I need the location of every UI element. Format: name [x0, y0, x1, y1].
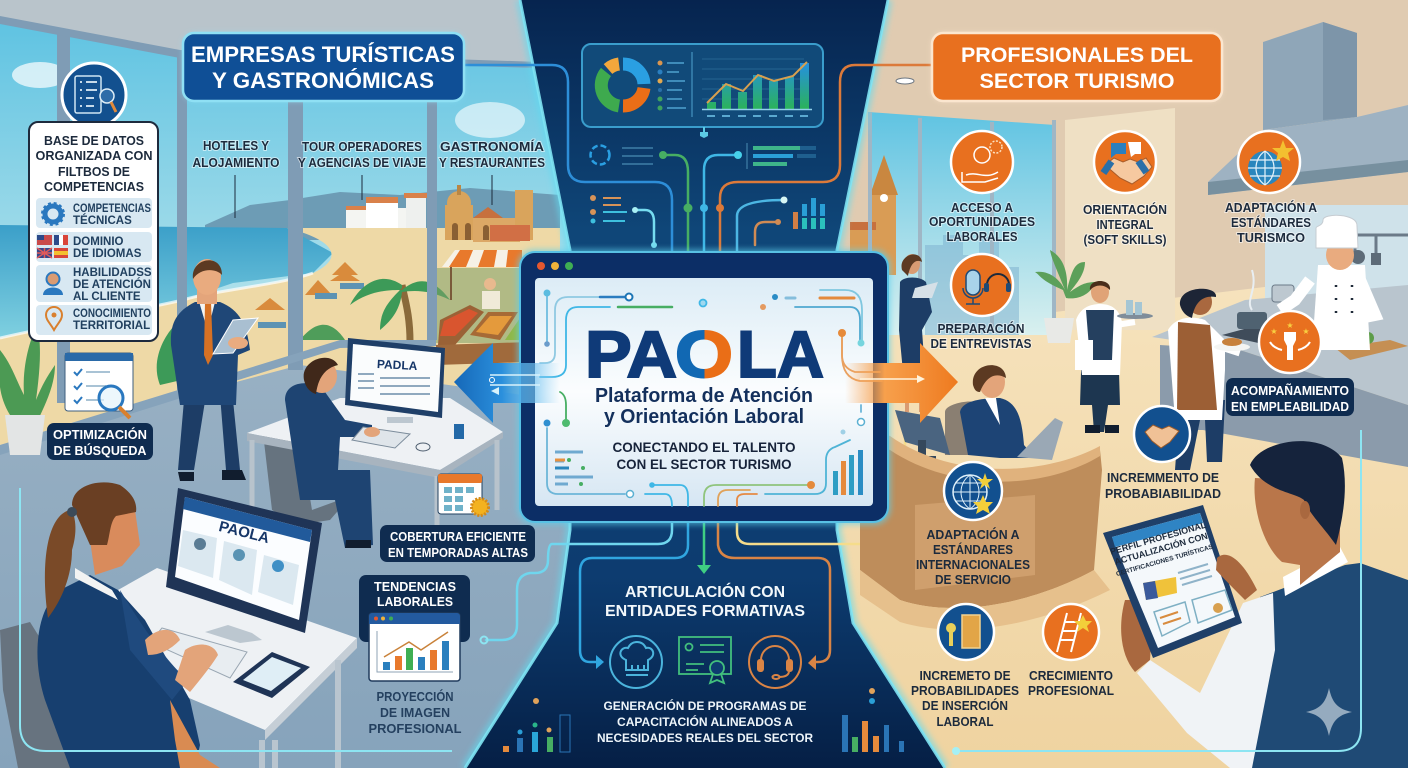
- palm tree: [157, 279, 450, 385]
- benefit: interview preparation: PREPARACIÓN: [938, 321, 1024, 336]
- label: search optimization: OPTIMIZACIÓN: [53, 427, 147, 442]
- benefit: access to opportunities: OPORTUNIDADES: [929, 214, 1035, 229]
- scene: tourism companies office (left): [0, 0, 600, 768]
- description: GENERACIÓN DE PROGRAMAS DE: [604, 698, 806, 713]
- label: high season coverage: EN TEMPORADAS ALTAS: [388, 545, 528, 560]
- label: hotels: HOTELES Y: [203, 138, 269, 153]
- light frame line: right: [956, 430, 1361, 751]
- hostess with tablet: [899, 254, 938, 412]
- kitchen hood and counter: [1152, 22, 1408, 467]
- benefit: employability support: ★: [1286, 321, 1294, 330]
- benefit: professional growth: [1028, 604, 1114, 698]
- beach umbrellas: [255, 262, 364, 328]
- tablet with professional profile: CERTIFICACIONES TURÍSTICAS: [1115, 542, 1214, 578]
- header: companies: [183, 33, 464, 101]
- center dark panel: [465, 0, 945, 768]
- node on right frame line: [952, 747, 960, 755]
- label: search optimization: DE BÚSQUEDA: [54, 443, 147, 458]
- row: customer service: AL CLIENTE: [73, 291, 141, 303]
- row: customer service: DE ATENCIÓN: [73, 278, 151, 291]
- window control dots: [537, 262, 573, 270]
- panel title: FILTBOS DE: [58, 165, 130, 179]
- window frame mullions: [0, 16, 540, 403]
- benefit: job insertion: INCREMETO DE: [920, 668, 1011, 683]
- plant: [1035, 250, 1096, 343]
- legend rows: [658, 60, 686, 110]
- header: professionals: PROFESIONALES DEL: [961, 44, 1193, 67]
- server with brown apron: [1168, 289, 1250, 470]
- label: professional image: PROYECCIÓN: [376, 689, 454, 704]
- hotel on the beach: [346, 193, 428, 228]
- benefit: interview preparation: [930, 254, 1032, 351]
- benefit: comprehensive orientation: INTEGRAL: [1096, 217, 1154, 232]
- seated man at desk with PAOLA monitor: [247, 338, 503, 548]
- benefit: interview preparation: DE ENTREVISTAS: [930, 336, 1032, 351]
- header: companies: EMPRESAS TURÍSTICAS: [191, 42, 455, 67]
- heading: ARTICULACIÓN CON: [625, 582, 785, 601]
- label: professional image: [368, 689, 462, 736]
- tagline: [612, 440, 796, 472]
- benefit: comprehensive orientation: (SOFT SKILLS): [1084, 232, 1166, 247]
- tablet with professional profile: PERFIL PROFESIONAL: [1109, 520, 1208, 557]
- benefit: employability support: [1259, 311, 1321, 373]
- donut chart: [601, 64, 644, 106]
- hand on tablet: [1216, 555, 1257, 600]
- benefit: job insertion: LABORAL: [936, 714, 994, 729]
- main PAOLA screen: [517, 249, 891, 525]
- label: tour operators: Y AGENCIAS DE VIAJE: [298, 155, 426, 170]
- benefit: increased probability: [1105, 406, 1221, 501]
- tagline: CON EL SECTOR TURISMO: [616, 457, 792, 472]
- benefit: professional growth: CRECIMIENTO: [1029, 668, 1113, 683]
- bar chart with trend line: [702, 59, 812, 116]
- label: gastronomy: GASTRONOMÍA: [440, 139, 545, 154]
- benefit: job insertion: DE INSERCIÓN: [922, 698, 1008, 713]
- label: tour operators: TOUR OPERADORES: [302, 139, 422, 154]
- row: technical skills: COMPETENCIAS: [73, 203, 151, 215]
- icon: headset: [749, 636, 801, 688]
- chef cooking: [1250, 215, 1375, 350]
- row: territorial knowledge: [36, 305, 152, 335]
- PAOLA logo: [585, 317, 824, 391]
- panel title: BASE DE DATOS: [44, 134, 144, 148]
- mini dashboard widgets: [590, 143, 825, 229]
- waiter with tray: [1075, 281, 1153, 433]
- foreground woman at desk: PAOLA: [217, 518, 271, 547]
- label: high season coverage: COBERTURA EFICIENTE: [390, 529, 526, 544]
- PAOLA logo: LA: [737, 317, 824, 391]
- label: professional image: DE IMAGEN: [380, 705, 450, 720]
- row: technical skills: [36, 198, 152, 228]
- label: gastronomy: [439, 139, 545, 205]
- left text-line widgets: [555, 452, 593, 486]
- standing man with tablet: [171, 259, 258, 481]
- row: customer service: [36, 265, 152, 303]
- benefit: standards adaptation (kitchen): TURISMCO: [1237, 230, 1305, 245]
- foreground man holding tablet: [1121, 441, 1408, 768]
- row: languages: [36, 232, 152, 262]
- benefit: international standards: [916, 462, 1030, 587]
- label: employability support: [1226, 378, 1354, 416]
- label: search optimization: [47, 423, 153, 460]
- people: professional side: [860, 215, 1408, 768]
- icon: chef hat: [610, 636, 662, 688]
- benefit: access to opportunities: [929, 131, 1035, 244]
- decorative mini chart: left: [503, 698, 570, 752]
- label: labor trends: [359, 575, 470, 642]
- label: professional image: PROFESIONAL: [368, 721, 462, 736]
- benefit: increased probability: PROBABIABILIDAD: [1105, 486, 1221, 501]
- description: NECESIDADES REALES DEL SECTOR: [597, 731, 813, 745]
- row: technical skills: TÉCNICAS: [73, 214, 132, 227]
- description: CAPACITACIÓN ALINEADOS A: [617, 714, 793, 729]
- platform name: y Orientación Laboral: [604, 406, 804, 428]
- benefit: professional growth: PROFESIONAL: [1028, 683, 1114, 698]
- clock tower: [850, 155, 898, 275]
- foreground woman at desk: [0, 482, 357, 768]
- PAOLA logo: O: [675, 317, 733, 391]
- row: customer service: HABILIDADSS: [73, 267, 152, 279]
- label: employability support: ACOMPAÑAMIENTO: [1231, 383, 1349, 398]
- icon: database search: [62, 63, 126, 127]
- icon: calendar with sun: [438, 474, 488, 516]
- seated man at desk with PAOLA monitor: PADLA: [377, 357, 418, 373]
- panel title: COMPETENCIAS: [44, 180, 144, 194]
- PAOLA logo: PA: [585, 317, 677, 391]
- reception desk and receptionist: [860, 365, 1110, 630]
- people and desks: company side: [0, 259, 503, 768]
- market stall: [436, 250, 532, 365]
- label: gastronomy: Y RESTAURANTES: [439, 155, 545, 170]
- dashboard panel with charts: [582, 44, 823, 127]
- row: territorial knowledge: TERRITORIAL: [73, 320, 150, 332]
- benefit: employability support: ★: [1270, 327, 1278, 336]
- watermark sparkle: [1306, 688, 1352, 736]
- benefit: international standards: INTERNACIONALES: [916, 557, 1030, 572]
- benefit: job insertion: PROBABILIDADES: [911, 683, 1019, 698]
- panel: filtered database: [29, 122, 158, 341]
- benefit: access to opportunities: LABORALES: [946, 229, 1018, 244]
- benefit: comprehensive orientation: [1083, 131, 1167, 247]
- label: labor trends: LABORALES: [377, 594, 453, 609]
- tablet with professional profile: ACTUALIZACIÓN CON: [1113, 530, 1209, 567]
- label: tour operators: [298, 139, 426, 200]
- label: high season coverage: [380, 525, 535, 562]
- panel title: ORGANIZADA CON: [36, 149, 152, 163]
- label: labor trends: TENDENCIAS: [374, 579, 456, 594]
- benefit: standards adaptation (kitchen): [1225, 131, 1318, 245]
- tablet with professional profile: [1103, 505, 1242, 658]
- benefit: access to opportunities: ACCESO A: [951, 200, 1014, 215]
- header: professionals: [932, 33, 1222, 101]
- description: [597, 698, 813, 745]
- circuit traces inside the screen: [540, 290, 882, 506]
- bottom section: training entities: [503, 582, 904, 752]
- tagline: CONECTANDO EL TALENTO: [612, 440, 796, 455]
- chart: labor trends window: [369, 613, 460, 681]
- icon: certificate: [679, 637, 731, 683]
- connector lines between panels: [464, 65, 932, 670]
- panel title: [36, 134, 152, 194]
- header: professionals: SECTOR TURISMO: [980, 70, 1174, 93]
- label: hotels: [192, 138, 280, 218]
- arrow: to professionals: [845, 343, 958, 423]
- icon: search optimization checklist: [65, 353, 133, 418]
- heading: [605, 582, 805, 620]
- label: hotels: ALOJAMIENTO: [192, 155, 280, 170]
- benefit: job insertion: [911, 604, 1019, 729]
- arrow: to companies: [454, 343, 560, 423]
- benefit: employability support: ★: [1302, 327, 1310, 336]
- heading: ENTIDADES FORMATIVAS: [605, 603, 805, 620]
- benefit: international standards: ESTÁNDARES: [933, 542, 1013, 557]
- benefit: international standards: DE SERVICIO: [935, 572, 1011, 587]
- row: languages: DOMINIO: [73, 236, 124, 248]
- mini bar chart: [833, 450, 863, 495]
- label: employability support: EN EMPLEABILIDAD: [1231, 399, 1349, 414]
- benefit: standards adaptation (kitchen): ADAPTACIÓN A: [1225, 200, 1318, 215]
- small connector node: [700, 132, 708, 138]
- benefit: comprehensive orientation: ORIENTACIÓN: [1083, 202, 1167, 217]
- row: territorial knowledge: CONOCIMIENTO: [73, 308, 151, 320]
- light frame line: left: [20, 488, 452, 751]
- decorative mini chart: right: [842, 688, 904, 752]
- sector labels over the window: [192, 138, 545, 218]
- row: languages: DE IDIOMAS: [73, 248, 142, 260]
- benefit: international standards: ADAPTACIÓN A: [926, 527, 1020, 542]
- church buildings: [445, 185, 533, 242]
- header: companies: Y GASTRONÓMICAS: [212, 68, 434, 93]
- platform name: Plataforma de Atención: [595, 385, 813, 407]
- benefit: increased probability: INCREMMENTO DE: [1107, 470, 1219, 485]
- benefit: standards adaptation (kitchen): ESTÁNDARES: [1231, 215, 1311, 230]
- scene: tourism professionals hotel (right): [820, 0, 1408, 768]
- platform name: [595, 385, 813, 428]
- icon: plant in pot: [0, 325, 55, 455]
